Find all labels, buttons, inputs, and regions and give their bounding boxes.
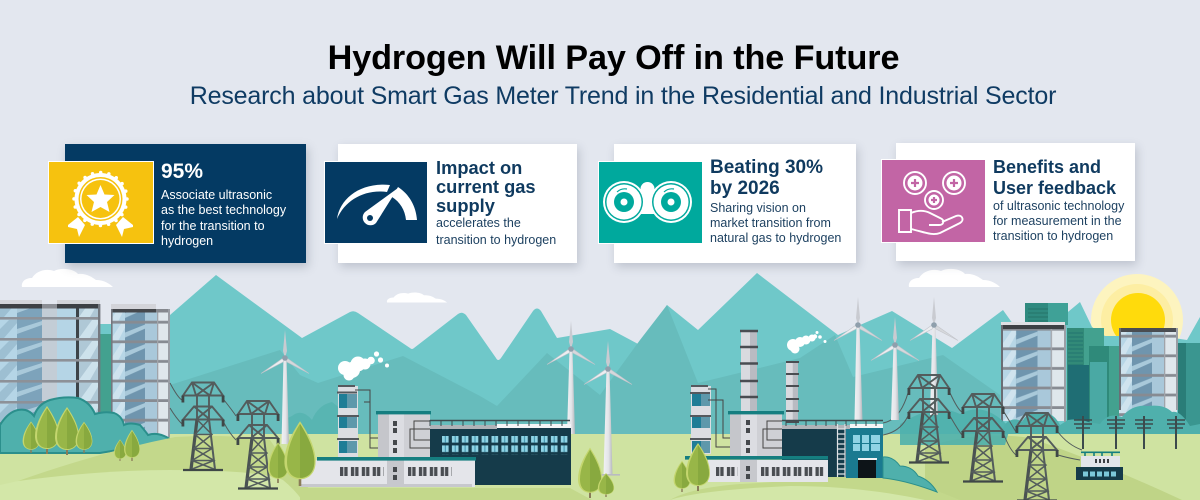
text: 95% description bbox=[161, 188, 286, 248]
heading: impact on current gas supply: Impact on bbox=[436, 157, 522, 178]
text: gas supply description: accelerates the bbox=[436, 216, 521, 230]
transmission towers bbox=[182, 375, 1058, 500]
heading: impact on current gas supply bbox=[436, 157, 536, 216]
power lines bbox=[170, 383, 1082, 460]
ground hill right bbox=[300, 435, 1182, 500]
building left 2 bbox=[111, 304, 170, 438]
ground hills left bbox=[0, 436, 320, 500]
text: beating 30% description: market transition from bbox=[710, 216, 831, 230]
front mountains bbox=[170, 305, 1000, 440]
text: benefits description: for measurement in the bbox=[993, 214, 1122, 228]
icon: hand with coins bbox=[880, 158, 986, 242]
icon: gauge bbox=[324, 160, 428, 244]
heading: benefits and user feedback bbox=[993, 157, 1116, 198]
panel: 95% card bbox=[65, 144, 306, 263]
heading: impact on current gas supply: current gas bbox=[436, 176, 536, 197]
text: beating 30% description: natural gas to hydrogen bbox=[710, 231, 841, 245]
panel: gas supply card bbox=[338, 144, 577, 263]
building right A bbox=[1001, 322, 1066, 422]
clouds bbox=[22, 269, 1000, 302]
city skyline greens bbox=[100, 303, 1200, 438]
text: beating 30% description bbox=[710, 201, 841, 245]
bush beside right factory bbox=[883, 457, 937, 492]
ground bbox=[0, 434, 1200, 500]
bushes behind city bbox=[1000, 406, 1200, 434]
text: benefits description bbox=[993, 199, 1124, 243]
heading: 95%: 95% bbox=[161, 160, 203, 183]
icon: binoculars bbox=[598, 161, 702, 244]
text: 95% description: Associate ultrasonic bbox=[161, 188, 272, 202]
text: 95% description: for the transition to bbox=[161, 219, 265, 233]
sun bbox=[1091, 274, 1183, 366]
wind turbines bbox=[261, 297, 958, 476]
smoke bbox=[338, 351, 389, 380]
factory left bbox=[300, 351, 571, 487]
smoke bbox=[787, 331, 826, 354]
text: gas supply description bbox=[436, 216, 556, 246]
text: benefits description: transition to hydrogen bbox=[993, 229, 1113, 243]
heading: beating 30% by 2026 bbox=[710, 157, 823, 199]
text: 95% description: as the best technology bbox=[161, 203, 286, 217]
panel: benefits card bbox=[896, 143, 1135, 261]
subtitle: Research about Smart Gas Meter Trend in the Residential and Industrial Sector bbox=[190, 82, 1056, 110]
heading: beating 30% by 2026: Beating 30% bbox=[710, 157, 823, 178]
icon: medal bbox=[48, 160, 154, 244]
building left 1 bbox=[0, 300, 100, 432]
text: benefits description: of ultrasonic technology bbox=[993, 199, 1124, 213]
heading: impact on current gas supply: supply bbox=[436, 195, 495, 216]
text: beating 30% description: Sharing vision on bbox=[710, 201, 806, 215]
back mountains bbox=[170, 273, 1200, 440]
trees bbox=[23, 406, 710, 498]
utility poles bbox=[1074, 416, 1185, 449]
heading: benefits and user feedback: Benefits and bbox=[993, 157, 1101, 177]
title: Hydrogen Will Pay Off in the Future bbox=[328, 39, 899, 77]
text: gas supply description: transition to hydrogen bbox=[436, 232, 556, 246]
text: 95% description: hydrogen bbox=[161, 234, 213, 248]
left bush group bbox=[0, 397, 174, 453]
building right B bbox=[1119, 328, 1178, 424]
heading: beating 30% by 2026: by 2026 bbox=[710, 178, 780, 199]
factory right bbox=[685, 331, 883, 482]
heading: benefits and user feedback: User feedback bbox=[993, 178, 1116, 198]
small substation bbox=[1076, 452, 1123, 480]
panel: beating 30% card bbox=[614, 144, 856, 263]
bushes behind tower right bbox=[900, 409, 1010, 445]
